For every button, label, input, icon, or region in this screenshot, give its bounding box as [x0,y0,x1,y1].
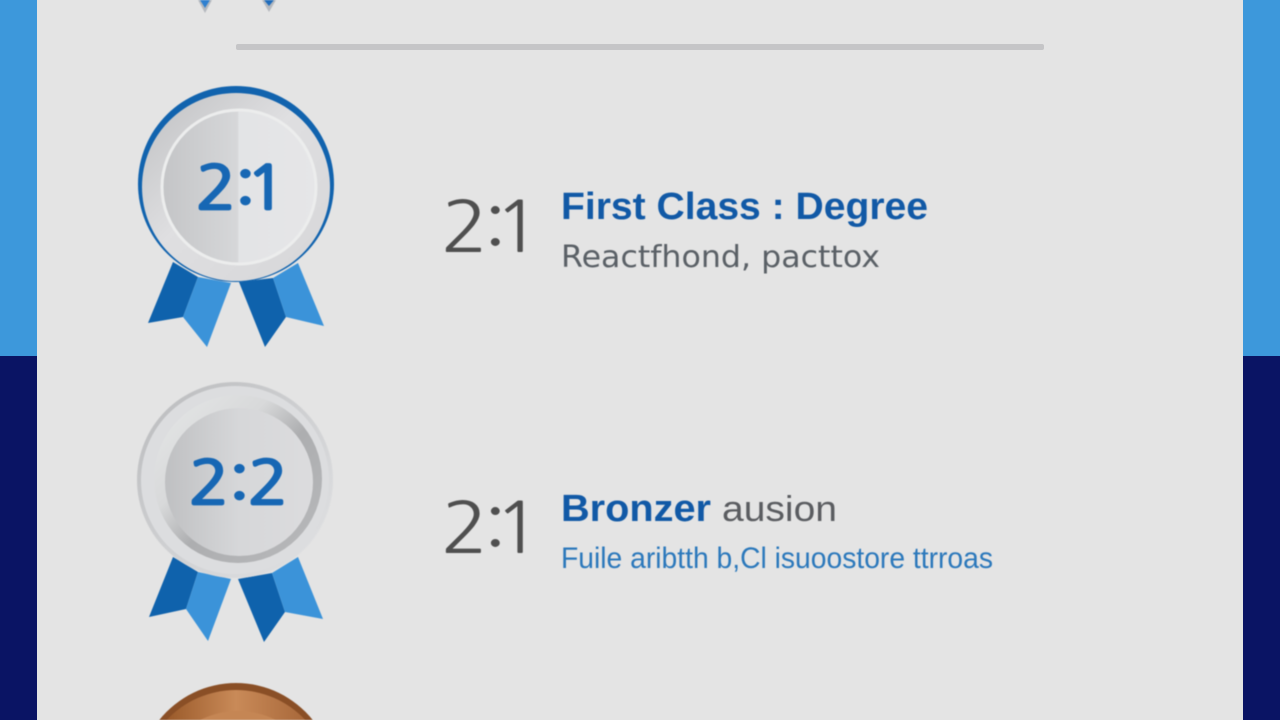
description: Fuile aribtth b,Cl isuoostore ttrroas [561,542,993,575]
divider [236,44,1044,50]
medal number 2:2: 2:2 [189,454,288,513]
text block: first class degree [561,186,928,275]
text block: bronze [561,488,993,575]
icon: cropped ribbon tips of the medal above [198,0,276,13]
left side band [0,0,37,720]
icon: silver medal 2:1 [138,86,334,347]
medal number 2:1: 2:1 [196,159,286,218]
heading: Bronzer [561,488,711,530]
large grade 2:1, first row: 2:1 [441,191,541,262]
heading: First Class : Degree [561,186,928,228]
icon: silver medal 2:2 [137,382,333,642]
heading suffix: ausion [722,488,837,529]
description: Reactfhond, pacttox [561,240,880,275]
icon: bronze medal, cropped at the bottom edge [159,683,313,720]
right side band [1243,0,1280,720]
large grade 2:1, second row: 2:1 [441,492,541,563]
